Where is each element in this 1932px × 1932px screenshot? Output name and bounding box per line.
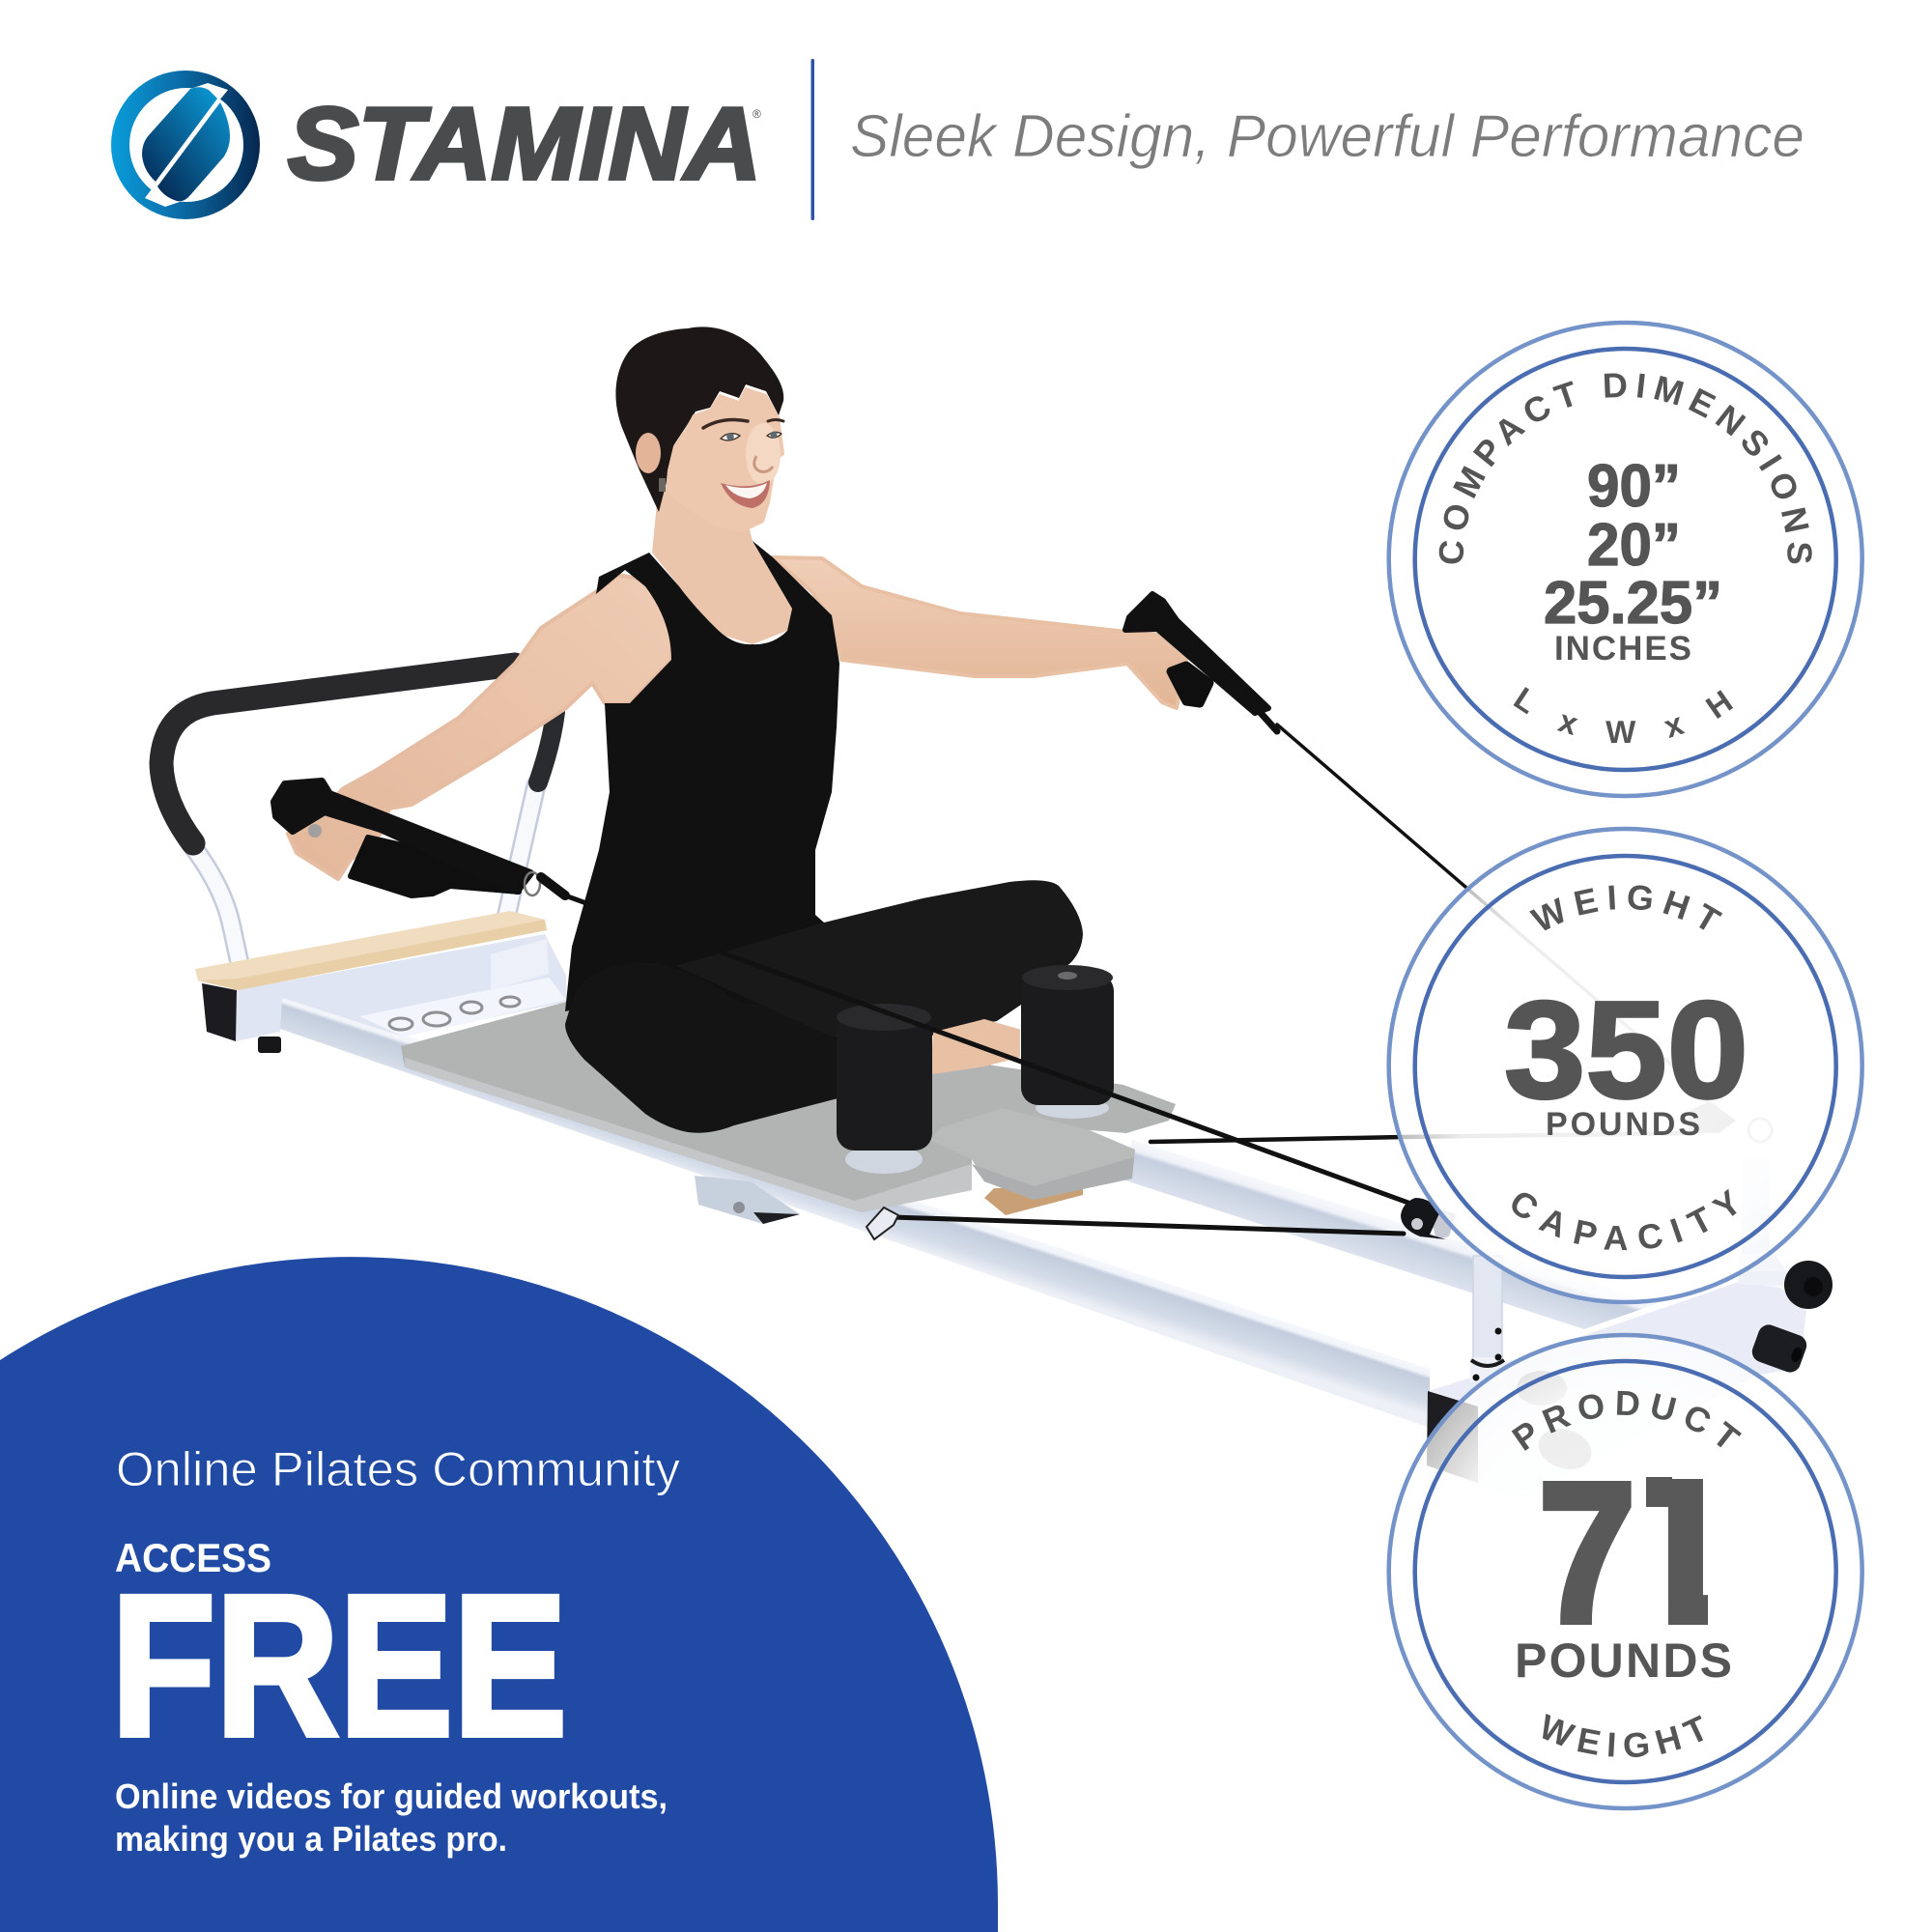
dimensions values: 25.25” — [1544, 570, 1722, 637]
tray hooks — [389, 997, 520, 1030]
value: 350: 350 — [1504, 974, 1748, 1127]
far rail — [1120, 1140, 1659, 1329]
curved label: l x w x h: L x W x H — [1513, 687, 1733, 744]
badge: weight capacity — [1386, 827, 1864, 1304]
cheek highlight — [746, 423, 781, 485]
unit: pounds: POUNDS — [1546, 1106, 1700, 1143]
seat bracket — [695, 1176, 800, 1224]
value: 71: 1 — [1624, 1442, 1734, 1663]
handle bar — [161, 665, 515, 968]
wood wedge — [984, 1188, 1083, 1215]
eyes and brows — [703, 419, 783, 440]
ring — [308, 824, 322, 838]
foam roller far — [1021, 965, 1114, 1119]
dimensions values: 90” — [1587, 453, 1681, 520]
text block: online videos: Online videos for guided workouts, — [115, 1776, 668, 1816]
heading: free: FREE — [111, 1554, 567, 1778]
foam roller near — [837, 1004, 932, 1174]
foot — [258, 1037, 281, 1053]
woman — [288, 327, 1186, 1133]
resistance cables — [565, 724, 1710, 1234]
rear post right — [1739, 1159, 1787, 1287]
badge rings — [1389, 323, 1862, 796]
curved label: weight: WEIGHT — [1542, 1714, 1704, 1758]
hair — [615, 327, 783, 512]
panel: blue community circle — [0, 1257, 998, 1932]
earring — [659, 478, 666, 492]
foot end frame — [202, 934, 566, 1053]
badge: compact dimensions — [1386, 321, 1864, 798]
curved label: product: PRODUCT — [1511, 1391, 1742, 1451]
badge rings — [1389, 829, 1862, 1302]
adjust knob — [1739, 1261, 1833, 1309]
right arm — [773, 557, 1186, 708]
ear — [636, 433, 661, 473]
text block: online videos: making you a Pilates pro. — [115, 1819, 507, 1859]
rear foot — [1749, 1321, 1809, 1376]
seat: main pad — [401, 1002, 1176, 1212]
icon: stamina mark — [111, 71, 260, 219]
right hand grip — [1125, 594, 1277, 731]
dimensions values — [1544, 453, 1722, 637]
pulley far ghost — [1689, 1101, 1772, 1142]
far knee — [676, 880, 1083, 1037]
near post — [1470, 1256, 1504, 1382]
left arm — [288, 575, 671, 879]
curved label: compact dimensions: COMPACT DIMENSIONS — [1439, 373, 1812, 564]
value: 71: 7 — [1539, 1442, 1635, 1663]
heading: online pilates community: Online Pilates Community — [116, 1442, 680, 1496]
rear top knob ghost — [1517, 1371, 1567, 1406]
rear knob underside ghost — [1533, 1422, 1597, 1476]
rear cross block — [1427, 1282, 1806, 1497]
lower body filler — [618, 956, 869, 1132]
near rail — [280, 995, 1430, 1428]
divider — [811, 59, 814, 220]
curved label: capacity: CAPACITY — [1512, 1188, 1737, 1250]
tank top — [565, 541, 839, 1011]
smile — [721, 480, 770, 508]
near leg — [565, 963, 845, 1133]
end block black face — [1427, 1391, 1478, 1483]
tagline: Sleek Design, Powerful Performance — [850, 103, 1804, 170]
pulley near — [1401, 1198, 1456, 1239]
nose shadow — [754, 456, 773, 471]
neck — [652, 483, 792, 644]
cable clip — [867, 1208, 898, 1239]
dimensions values: 20” — [1587, 512, 1681, 579]
curved label: weight: WEIGHT — [1529, 885, 1722, 931]
text block: online videos — [115, 1776, 668, 1859]
badge: product weight — [1386, 1333, 1864, 1810]
seat: head rest — [929, 1108, 1135, 1200]
face — [667, 388, 783, 531]
foot end cap — [202, 983, 237, 1041]
registered mark: ® — [753, 107, 761, 121]
wordmark: STAMINA: STAMINA — [288, 87, 761, 201]
label: access: ACCESS — [115, 1535, 271, 1580]
unit: inches: INCHES — [1554, 630, 1691, 668]
left hand grip — [274, 781, 565, 895]
wood foot board — [195, 911, 547, 990]
logo: stamina — [111, 71, 761, 219]
value: 71 — [1543, 1477, 1708, 1625]
handle bar back post — [506, 712, 555, 918]
bare feet — [932, 1021, 1018, 1072]
product: pilates reformer with woman — [161, 327, 1833, 1497]
unit: pounds: POUNDS — [1515, 1634, 1732, 1688]
badge rings — [1389, 1335, 1862, 1808]
